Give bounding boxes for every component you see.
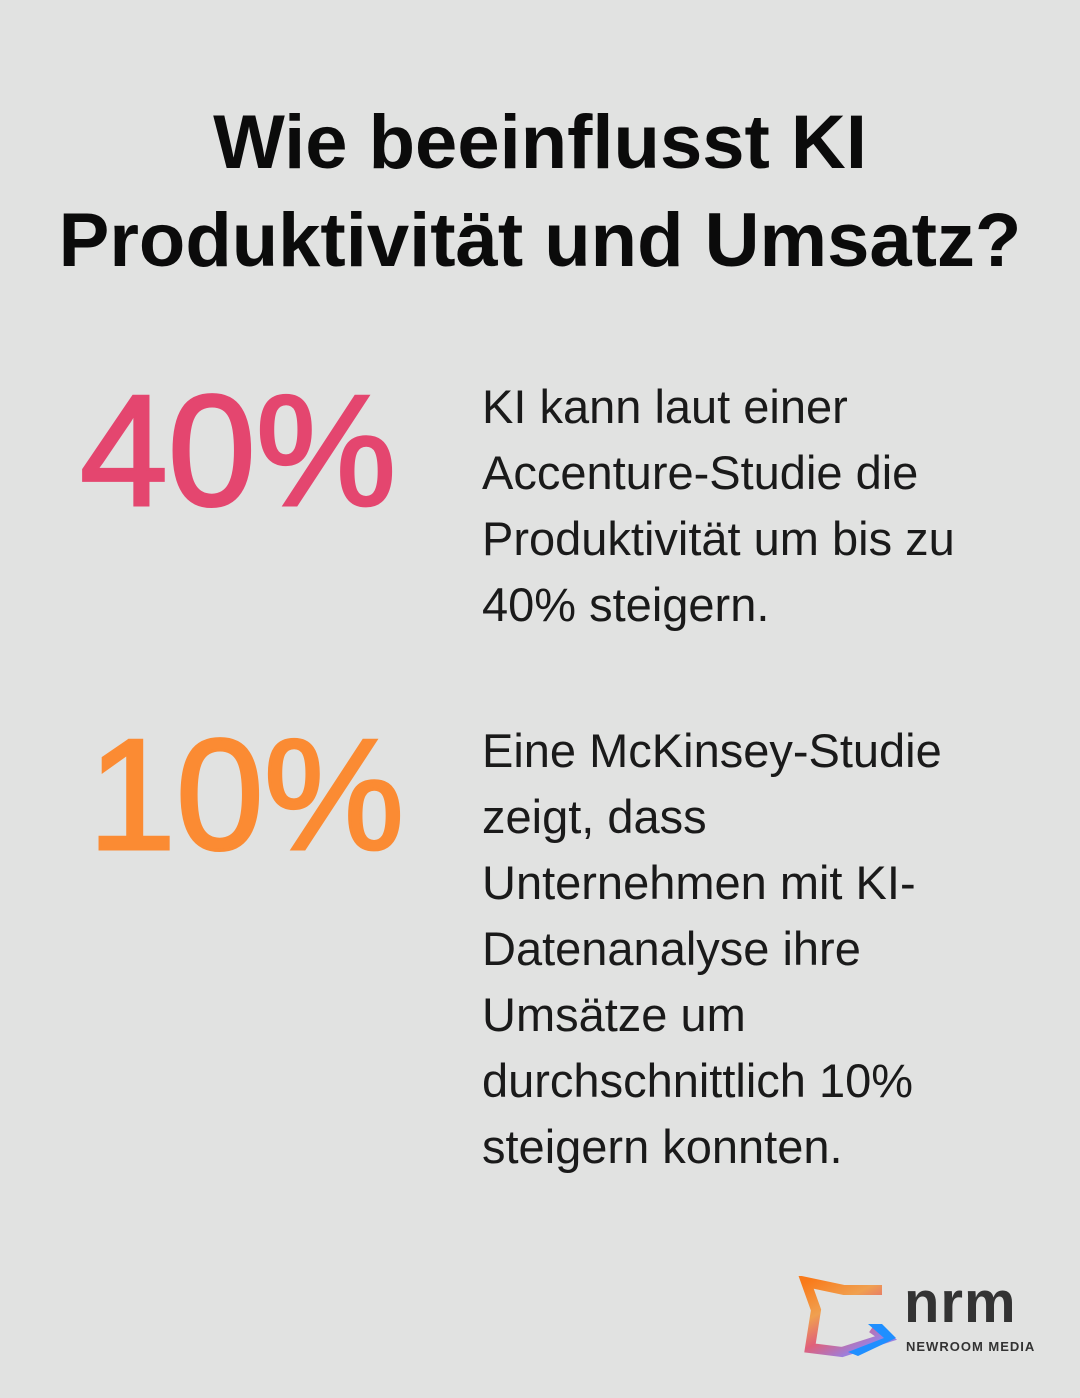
text: productivity: KI kann laut einer [482,380,848,433]
text: revenue: zeigt, dass [482,790,707,843]
text: revenue: Datenanalyse ihre [482,922,861,975]
text: revenue [482,724,942,1173]
text: productivity: 40% steigern. [482,578,769,631]
text: productivity: Accenture-Studie die [482,446,918,499]
title: Produktivität und Umsatz? [59,198,1021,283]
title [59,100,1021,283]
logo: NEWROOM MEDIA [906,1339,1035,1354]
stat: 40%: 40% [80,363,396,539]
text: productivity [482,380,955,631]
stat: 10%: 10% [88,707,404,883]
text: revenue: steigern konnten. [482,1120,843,1173]
text: revenue: Umsätze um [482,988,746,1041]
title: Wie beeinflusst KI [213,100,867,185]
text: revenue: durchschnittlich 10% [482,1054,913,1107]
text: revenue: Unternehmen mit KI- [482,856,916,909]
logo: nrm [904,1270,1017,1335]
logo [798,1270,1035,1358]
text: productivity: Produktivität um bis zu [482,512,955,565]
text: revenue: Eine McKinsey-Studie [482,724,942,777]
